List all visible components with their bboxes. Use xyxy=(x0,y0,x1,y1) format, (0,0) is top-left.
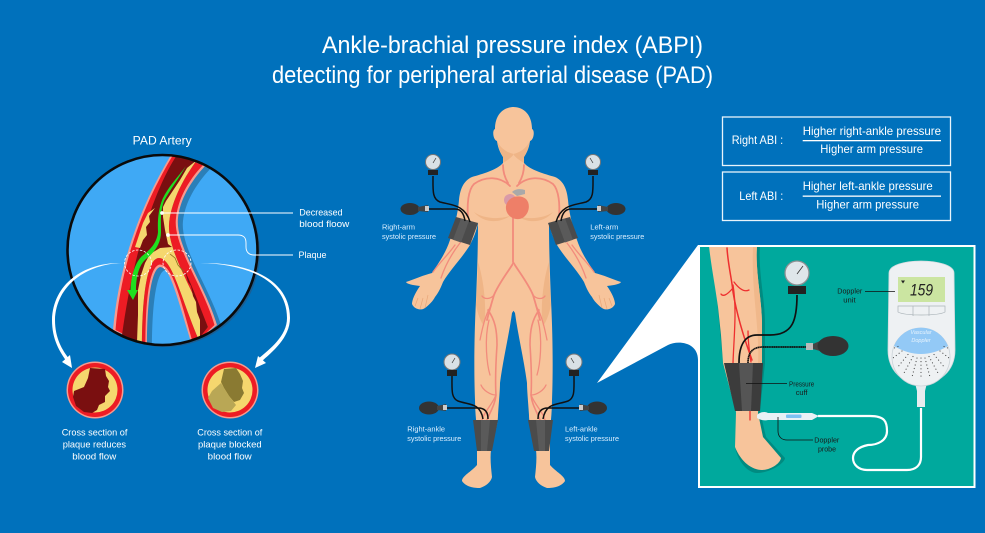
annotation: doppler unit: Doppler xyxy=(837,286,863,295)
label: decreased blood flow: blood floow xyxy=(299,219,349,230)
annotation: doppler unit: unit xyxy=(843,295,857,304)
formula box: right ABI xyxy=(722,117,950,166)
callout pointer xyxy=(597,245,698,383)
label: plaque: Plaque xyxy=(298,250,326,261)
gauge and bulb hoses xyxy=(739,295,808,363)
annotation: doppler probe xyxy=(778,417,840,453)
left ankle pressure set xyxy=(528,354,607,451)
caption: blocked flow: Cross section of xyxy=(197,428,263,439)
speaker: Doppler xyxy=(911,338,932,344)
formula box: left ABI xyxy=(722,172,950,220)
cross section: blocked flow xyxy=(202,362,258,418)
formula box: left ABI: Higher left-ankle pressure xyxy=(803,179,933,193)
label: left arm xyxy=(590,222,644,241)
doppler unit xyxy=(888,261,955,407)
pressure cuff xyxy=(724,363,763,411)
annotation: pressure cuff xyxy=(746,380,814,397)
label: left arm: systolic pressure xyxy=(590,232,644,241)
title: Ankle-brachial pressure index (ABPI) xyxy=(322,32,703,59)
cross section: reduced flow xyxy=(66,362,124,418)
caption: reduced flow: plaque reduces xyxy=(63,440,126,451)
formula box: right ABI: Right ABI : xyxy=(732,133,783,147)
body figure xyxy=(406,107,621,488)
title: detecting for peripheral arterial disease (PAD) xyxy=(272,62,713,89)
gauge xyxy=(785,261,809,294)
formula box: left ABI: Left ABI : xyxy=(739,189,783,203)
title xyxy=(272,32,713,89)
label: right arm: Right-arm xyxy=(382,222,415,231)
formula box: right ABI: Higher arm pressure xyxy=(820,142,923,156)
display screen xyxy=(898,277,945,302)
formula box: left ABI: Higher arm pressure xyxy=(816,198,919,212)
label: right arm xyxy=(382,222,436,241)
magnified artery circle xyxy=(68,155,260,348)
caption: blocked flow xyxy=(197,428,263,462)
label: left ankle: systolic pressure xyxy=(565,434,619,443)
label: decreased blood flow xyxy=(299,208,349,230)
caption: blocked flow: blood flow xyxy=(208,451,252,462)
dashed plaque markers xyxy=(124,250,152,276)
left arm pressure set xyxy=(548,154,626,245)
speaker xyxy=(892,328,950,386)
leg close-up xyxy=(709,246,785,473)
green flow arrow xyxy=(127,166,186,300)
annotation: pressure cuff: cuff xyxy=(796,388,808,397)
label: right ankle: Right-ankle xyxy=(407,424,445,433)
caption: reduced flow: Cross section of xyxy=(62,428,128,439)
label: decreased blood flow: Decreased xyxy=(299,208,343,219)
doppler probe and cord xyxy=(757,408,921,470)
caption: blocked flow: plaque blocked xyxy=(198,440,262,451)
label: left ankle xyxy=(565,424,619,443)
leader: plaque xyxy=(167,234,293,255)
icon: heart xyxy=(504,189,529,219)
label: right arm: systolic pressure xyxy=(382,232,436,241)
display screen: 159 xyxy=(910,282,933,300)
panel: PAD artery xyxy=(52,133,349,462)
speaker: Vascular xyxy=(910,330,933,336)
annotation: doppler unit xyxy=(837,286,895,304)
bulb xyxy=(806,336,848,356)
annotation: doppler probe: probe xyxy=(818,444,836,453)
label: left arm: Left-arm xyxy=(590,222,618,231)
panel: doppler measurement xyxy=(699,246,974,487)
label: right ankle: systolic pressure xyxy=(407,434,461,443)
arrow: to left cross section xyxy=(52,263,122,368)
right arm pressure set xyxy=(400,154,478,245)
caption: reduced flow xyxy=(62,428,128,462)
heading: PAD Artery: PAD Artery xyxy=(133,133,192,147)
annotation: doppler probe: Doppler xyxy=(814,435,840,444)
label: right ankle xyxy=(407,424,461,443)
caption: reduced flow: blood flow xyxy=(72,451,116,462)
buttons xyxy=(898,306,945,316)
label: left ankle: Left-ankle xyxy=(565,424,598,433)
arrow: to right cross section xyxy=(200,263,290,368)
right ankle pressure set xyxy=(419,354,498,451)
panel: human body xyxy=(382,107,644,488)
formula box: right ABI: Higher right-ankle pressure xyxy=(803,124,941,138)
annotation: pressure cuff: Pressure xyxy=(789,380,814,389)
leader: decreased blood flow xyxy=(161,212,293,214)
